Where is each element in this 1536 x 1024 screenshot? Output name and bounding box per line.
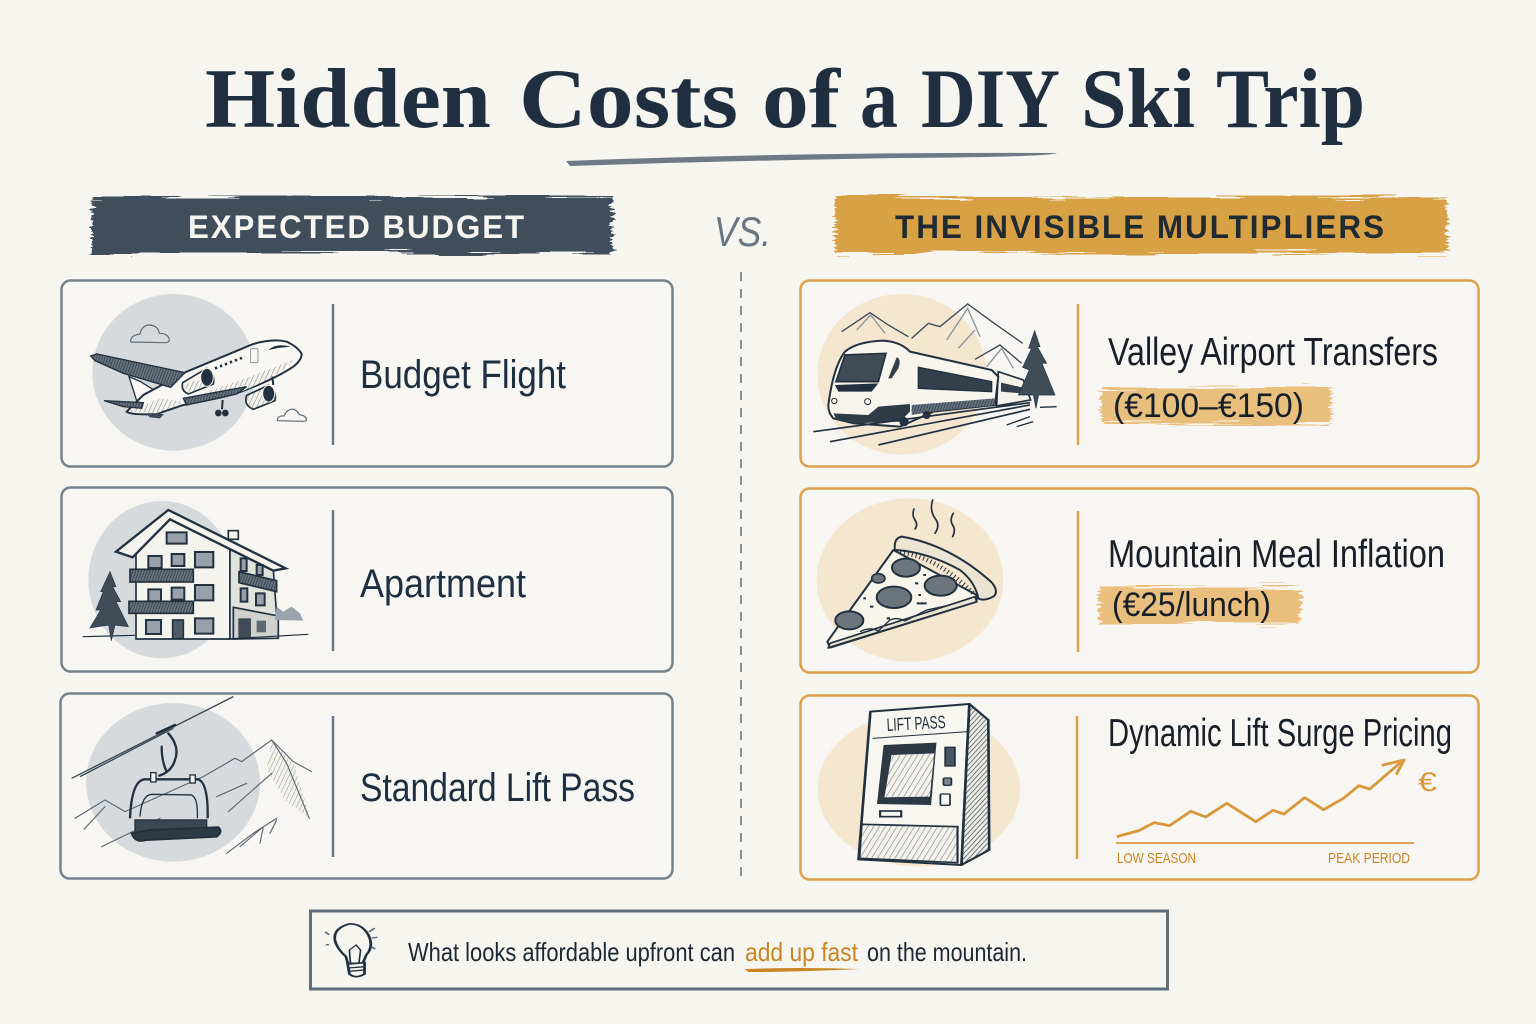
icon: light bulb bbox=[325, 924, 377, 977]
title bbox=[205, 52, 1365, 146]
heading: the invisible multipliers: THE INVISIBLE MULTIPLIERS bbox=[895, 209, 1386, 245]
callout text: on the mountain. bbox=[867, 937, 1027, 967]
icon: train and mountains bbox=[813, 294, 1057, 455]
line chart: surge pricing: LOW SEASON bbox=[1117, 850, 1196, 867]
line chart: surge pricing bbox=[1116, 760, 1437, 867]
panel: valley airport transfers bbox=[800, 280, 1478, 466]
icon: chairlift and mountains bbox=[72, 697, 312, 862]
icon: lift pass kiosk: LIFT PASS bbox=[886, 712, 946, 735]
panel: apartment bbox=[62, 488, 672, 672]
icon: lift pass kiosk bbox=[818, 704, 1020, 867]
label: standard lift pass: Standard Lift Pass bbox=[360, 766, 635, 810]
heading: expected budget: EXPECTED BUDGET bbox=[188, 209, 526, 245]
callout text: add up fast bbox=[745, 937, 859, 967]
line chart: surge pricing: PEAK PERIOD bbox=[1328, 850, 1410, 867]
panel: dynamic lift surge pricing bbox=[800, 696, 1478, 880]
panel: mountain meal inflation bbox=[800, 488, 1478, 672]
panel: budget flight bbox=[62, 280, 672, 466]
label: valley airport transfers: Valley Airport Transfers bbox=[1108, 331, 1438, 374]
icon: pizza slice bbox=[817, 498, 1003, 662]
panel: standard lift pass bbox=[60, 694, 672, 878]
line chart: surge pricing: € bbox=[1418, 767, 1437, 797]
callout text bbox=[408, 937, 1027, 967]
label: apartment: Apartment bbox=[360, 562, 526, 606]
title: Costs bbox=[519, 52, 738, 146]
heading: expected budget bbox=[92, 197, 612, 253]
title underline bbox=[566, 153, 1057, 166]
title: a bbox=[860, 52, 898, 146]
title: Ski bbox=[1081, 52, 1195, 146]
callout bbox=[310, 911, 1168, 989]
highlight: lunch cost: (€25/lunch) bbox=[1112, 586, 1271, 624]
highlight: transfer cost: (€100–€150) bbox=[1113, 387, 1304, 425]
label: mountain meal inflation: Mountain Meal Inflation bbox=[1108, 533, 1445, 576]
heading: the invisible multipliers bbox=[835, 197, 1447, 253]
callout text: What looks affordable upfront can bbox=[408, 937, 735, 967]
icon: airplane bbox=[91, 294, 307, 451]
icon: chalet apartment building bbox=[83, 501, 308, 658]
title: Hidden bbox=[205, 52, 491, 146]
label: budget flight: Budget Flight bbox=[360, 353, 566, 397]
title: DIY bbox=[921, 52, 1060, 146]
title: of bbox=[762, 52, 842, 146]
title: Trip bbox=[1216, 52, 1365, 146]
versus label: VS. bbox=[714, 208, 771, 255]
